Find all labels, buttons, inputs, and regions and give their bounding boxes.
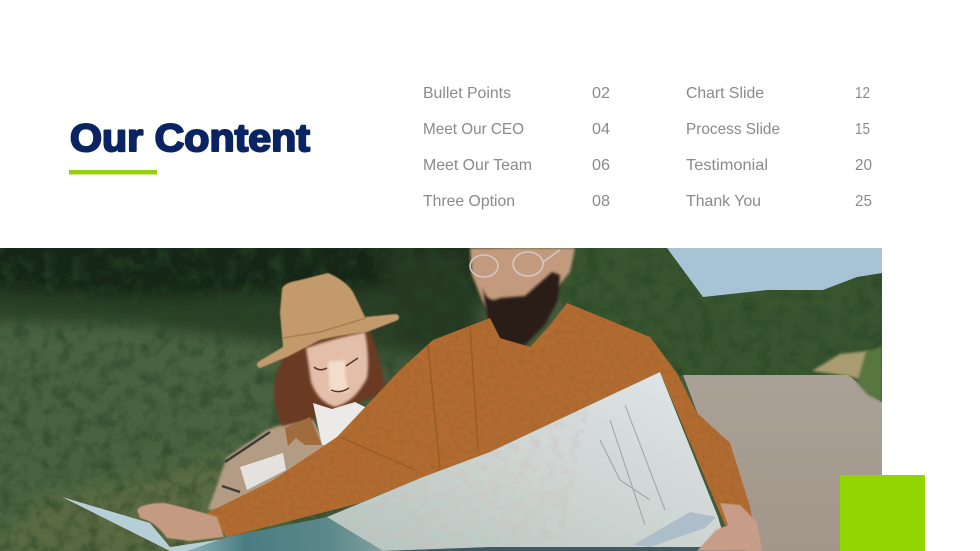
woman eyes and mouth (314, 358, 358, 392)
green accent square (840, 475, 925, 551)
woman face (306, 332, 368, 407)
map left corner (62, 497, 230, 551)
coat collar (285, 417, 322, 446)
item: Chart Slide: Chart Slide (686, 85, 764, 102)
roadside grass (812, 351, 870, 382)
item: Meet Our CEO (423, 121, 610, 138)
woman coat (207, 418, 325, 512)
glasses (470, 250, 560, 277)
woman hair (274, 330, 386, 426)
item: Bullet Points: Bullet Points (423, 85, 511, 102)
item: Testimonial: Testimonial (686, 157, 768, 174)
item: Meet Our CEO: Meet Our CEO (423, 121, 524, 138)
item: Bullet Points (423, 85, 610, 102)
sweater cable lines (340, 325, 478, 470)
item: Meet Our CEO: 04 (592, 121, 610, 138)
item: Process Slide: Process Slide (686, 121, 780, 138)
item: Thank You: 25 (855, 193, 872, 210)
title underline (69, 170, 157, 174)
item: Thank You (686, 193, 872, 210)
map pattern (338, 410, 588, 548)
man (200, 248, 760, 540)
foliage texture (0, 248, 480, 551)
item: Testimonial (686, 157, 872, 174)
hat band (283, 318, 366, 338)
face highlight (328, 360, 350, 392)
contents list: left column (423, 85, 610, 210)
item: Three Option: Three Option (423, 193, 515, 210)
item: Meet Our Team: 06 (592, 157, 610, 174)
coat stripes (222, 432, 270, 492)
man beard (482, 272, 560, 345)
item: Meet Our Team (423, 157, 610, 174)
contents list: right column (686, 85, 872, 210)
man face (468, 248, 576, 310)
item: Chart Slide (686, 85, 870, 102)
hat (257, 273, 399, 368)
item: Testimonial: 20 (855, 157, 872, 174)
right hand (697, 503, 762, 551)
item: Chart Slide: 12 (855, 85, 870, 102)
item: Three Option: 08 (592, 193, 610, 210)
roadside bushes (857, 346, 882, 402)
coat white patch (240, 453, 286, 490)
woman (207, 272, 400, 512)
right tree line (540, 248, 882, 440)
map grid lines (600, 405, 665, 525)
item: Meet Our Team: Meet Our Team (423, 157, 532, 174)
item: Process Slide: 15 (855, 121, 870, 138)
right tree texture (571, 248, 882, 375)
photo: couple reading a map on a forest road (0, 230, 882, 551)
item: Process Slide (686, 121, 870, 138)
item: Three Option (423, 193, 610, 210)
left hand (137, 503, 224, 541)
map light panel (327, 372, 727, 551)
white turtleneck (313, 402, 367, 445)
sky (667, 248, 882, 297)
map dark lower edge (383, 547, 727, 551)
item: Bullet Points: 02 (592, 85, 610, 102)
title: Our Content (70, 117, 310, 160)
item: Thank You: Thank You (686, 193, 761, 210)
sweater knit texture (200, 300, 760, 540)
map teal lower section (187, 517, 383, 551)
map fold shadow (633, 512, 716, 547)
orange sweater (207, 303, 754, 537)
photo background: forest (0, 230, 882, 551)
unfolded map (62, 372, 727, 551)
road (683, 375, 882, 551)
